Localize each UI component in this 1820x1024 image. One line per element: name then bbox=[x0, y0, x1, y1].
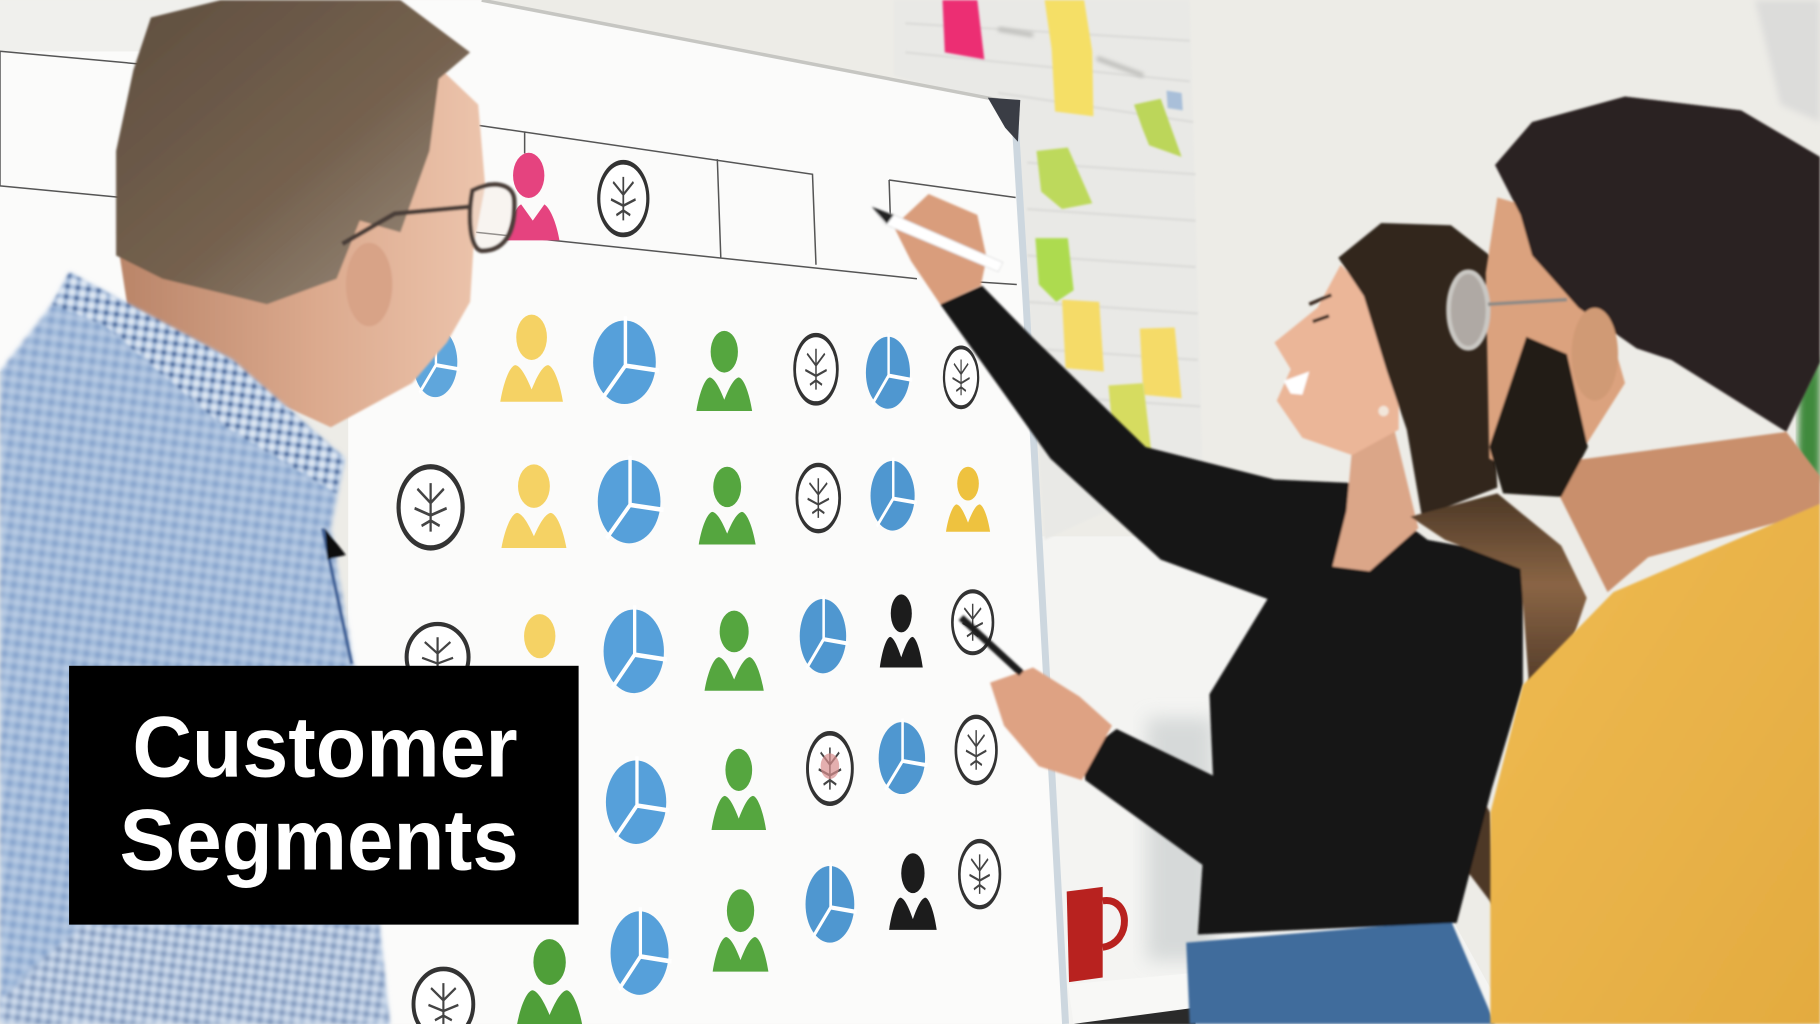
icon: green person bbox=[712, 749, 766, 830]
icon: black person bbox=[880, 594, 923, 668]
hair bbox=[116, 0, 470, 304]
hair bbox=[1495, 96, 1820, 432]
man on right bbox=[1449, 96, 1820, 1024]
collar bbox=[52, 273, 345, 493]
icon: ring bbox=[399, 467, 463, 548]
ear bbox=[1572, 308, 1618, 401]
lower shirt check bbox=[0, 924, 389, 1024]
icon: ring bbox=[407, 624, 469, 690]
icon: pie partial bbox=[413, 324, 460, 397]
sticky: pink bbox=[942, 0, 984, 59]
curtain bbox=[1755, 0, 1820, 122]
icon: pie bbox=[879, 718, 927, 794]
icon: ring bbox=[952, 591, 993, 653]
yellow shirt bbox=[1490, 504, 1820, 1024]
icon: pie bbox=[593, 316, 659, 404]
icon: green person bottom bbox=[517, 939, 583, 1024]
icon: green person bbox=[699, 467, 756, 544]
icon: yellow person bbox=[501, 464, 566, 548]
icon: ring bottom bbox=[413, 969, 473, 1024]
icon: pie bbox=[871, 457, 917, 531]
ear bbox=[346, 243, 392, 326]
sticky: lime bottom bbox=[1108, 383, 1151, 453]
neck and head bbox=[116, 58, 485, 427]
woman at whiteboard bbox=[872, 194, 1587, 1024]
neck bbox=[1544, 432, 1820, 592]
beard bbox=[1489, 337, 1588, 497]
title text: Customer bbox=[132, 700, 518, 796]
whiteboard bbox=[0, 0, 1066, 1024]
icon: green person bbox=[696, 331, 752, 411]
icon: ring bbox=[956, 717, 996, 783]
man on left bbox=[0, 0, 514, 1024]
icon: ring top bbox=[599, 162, 648, 235]
jeans bbox=[1186, 921, 1495, 1024]
hand on marker bbox=[894, 194, 987, 304]
icon: green person bbox=[713, 889, 768, 972]
top hair bbox=[1338, 223, 1497, 517]
sticky: green lower bbox=[1035, 238, 1074, 302]
lower hand bbox=[990, 668, 1112, 780]
icon: pie bbox=[604, 605, 667, 693]
collar button bbox=[325, 528, 346, 560]
icon: pie bbox=[866, 333, 912, 409]
icon: pie bbox=[598, 456, 664, 543]
marker tips bbox=[872, 207, 894, 224]
plant bbox=[1798, 354, 1820, 482]
face bbox=[1486, 197, 1625, 493]
sticky: green top bbox=[1134, 99, 1182, 157]
sticky: green middle bbox=[1037, 148, 1092, 209]
placket edge bbox=[323, 528, 352, 664]
sticky: yellow top bbox=[1045, 0, 1093, 116]
shirt bbox=[0, 273, 389, 1024]
icon: ring with pink centre bbox=[807, 733, 852, 804]
icon: pie bbox=[806, 862, 857, 943]
icon: pink person bbox=[506, 153, 559, 240]
icon: pie bbox=[611, 907, 671, 995]
icon: pie bbox=[800, 595, 848, 673]
sticky: yellow centre bbox=[1062, 300, 1104, 372]
eye and brow bbox=[1309, 295, 1331, 322]
long hair bbox=[1410, 493, 1587, 697]
sticky: yellow right bbox=[1140, 327, 1182, 398]
icon: yellow head bbox=[524, 614, 555, 658]
icon: ring bbox=[959, 841, 1000, 907]
notice board with sticky notes bbox=[894, 0, 1202, 540]
icon: pie bbox=[606, 756, 669, 844]
back hair bbox=[1462, 789, 1495, 908]
table lines bbox=[0, 51, 1017, 285]
red mug bbox=[1067, 887, 1124, 982]
icon: yellow person bbox=[500, 315, 563, 402]
black top and arms bbox=[940, 286, 1523, 934]
lower wall and shelf area bbox=[1039, 536, 1509, 1024]
icon grid bbox=[399, 153, 1000, 1024]
glasses bbox=[342, 185, 514, 251]
face bbox=[1274, 265, 1399, 455]
smile bbox=[1284, 372, 1309, 395]
title text: Segments bbox=[120, 793, 519, 889]
icon: amber person bbox=[946, 467, 990, 532]
glasses bbox=[1449, 272, 1567, 348]
neck bbox=[1332, 424, 1418, 571]
icon: green person bbox=[705, 611, 764, 691]
marker bbox=[873, 208, 1003, 272]
earring bbox=[1378, 406, 1389, 416]
stylus bbox=[961, 618, 1021, 673]
icon: ring bbox=[797, 465, 840, 531]
icon: ring bbox=[944, 347, 978, 407]
icon: black person bbox=[889, 853, 937, 930]
title box bbox=[69, 666, 579, 925]
icon: ring bbox=[795, 335, 837, 403]
board corner bbox=[988, 98, 1020, 142]
